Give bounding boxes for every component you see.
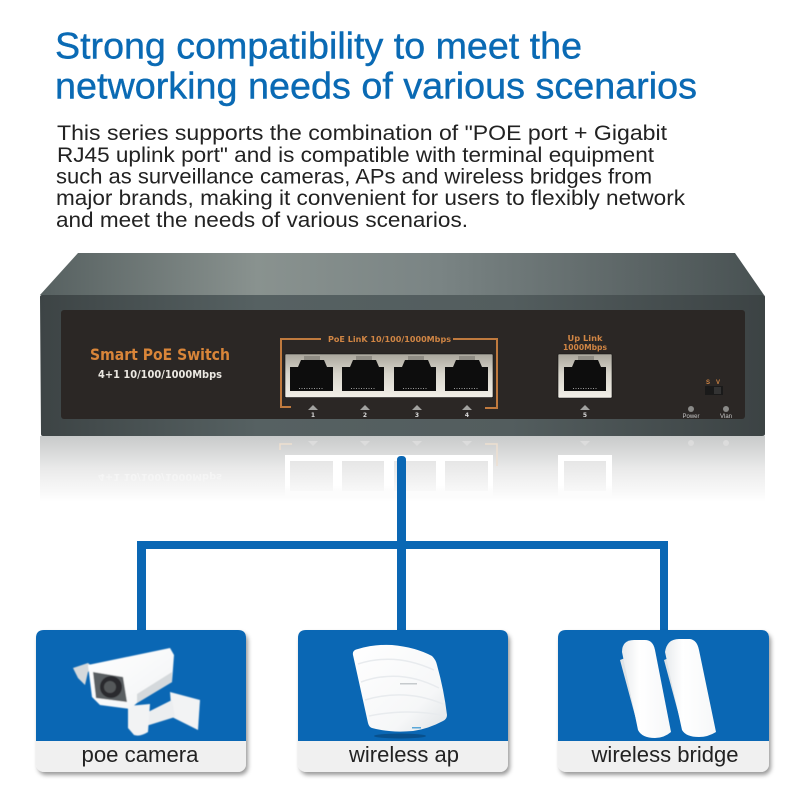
description text: major brands, making it convenient for users to flexibly network bbox=[56, 186, 685, 210]
S V switch: S bbox=[706, 380, 710, 386]
brand label bbox=[90, 345, 230, 381]
port numbers: 4 bbox=[465, 412, 469, 419]
description text: and meet the needs of various scenarios. bbox=[56, 208, 468, 232]
brand label: 4+1 10/100/1000Mbps bbox=[98, 368, 222, 381]
switch top face bbox=[40, 253, 764, 295]
card label: wireless bridge bbox=[590, 742, 738, 767]
icon: security camera bbox=[73, 648, 200, 736]
connection lines bbox=[137, 456, 668, 632]
description text: such as surveillance cameras, APs and wireless bridges from bbox=[56, 164, 652, 188]
card blue area bbox=[558, 630, 769, 741]
card: poe camera bbox=[36, 630, 246, 772]
uplink label bbox=[563, 334, 607, 352]
card label: wireless ap bbox=[348, 742, 459, 767]
uplink label: 1000Mbps bbox=[563, 343, 607, 352]
description text: This series supports the combination of "POE port + Gigabit bbox=[57, 121, 667, 145]
card label: poe camera bbox=[82, 742, 199, 767]
switch reflection bbox=[40, 436, 765, 502]
PoE port group bracket bbox=[281, 339, 497, 408]
uplink label: Up Link bbox=[568, 334, 603, 343]
port numbers bbox=[311, 412, 587, 419]
power LED bbox=[682, 406, 700, 420]
card base bbox=[298, 630, 508, 772]
switch reflection: 4+1 10/100/1000Mbps bbox=[98, 471, 222, 482]
port numbers: 2 bbox=[363, 412, 367, 419]
S V switch bbox=[705, 380, 723, 395]
vlan LED bbox=[720, 406, 732, 420]
card base bbox=[36, 630, 246, 772]
card base bbox=[558, 630, 769, 772]
switch front face bbox=[40, 295, 765, 436]
network switch bbox=[40, 253, 765, 436]
power LED: Power bbox=[682, 414, 700, 420]
port numbers: 1 bbox=[311, 412, 315, 419]
title: networking needs of various scenarios bbox=[55, 66, 697, 106]
PoE ports 1-4 bbox=[285, 354, 493, 398]
card blue area bbox=[36, 630, 246, 741]
card: wireless bridge bbox=[558, 630, 769, 772]
S V switch: V bbox=[716, 380, 720, 386]
port numbers: 3 bbox=[415, 412, 419, 419]
card blue area bbox=[298, 630, 508, 741]
front panel label plate bbox=[61, 310, 745, 419]
title bbox=[55, 26, 697, 106]
vlan LED: Vlan bbox=[720, 414, 732, 420]
description text: RJ45 uplink port" and is compatible with terminal equipment bbox=[57, 143, 654, 167]
brand label: Smart PoE Switch bbox=[90, 345, 230, 364]
uplink port bbox=[558, 354, 612, 398]
port numbers: 5 bbox=[583, 412, 587, 419]
description text bbox=[56, 121, 685, 232]
port markers bbox=[308, 405, 590, 410]
card: wireless ap bbox=[298, 630, 508, 772]
icon: ceiling access point bbox=[353, 645, 447, 738]
icon: wireless bridges bbox=[620, 639, 716, 738]
title: Strong compatibility to meet the bbox=[55, 26, 582, 66]
PoE link label: PoE LinK 10/100/1000Mbps bbox=[328, 335, 451, 344]
